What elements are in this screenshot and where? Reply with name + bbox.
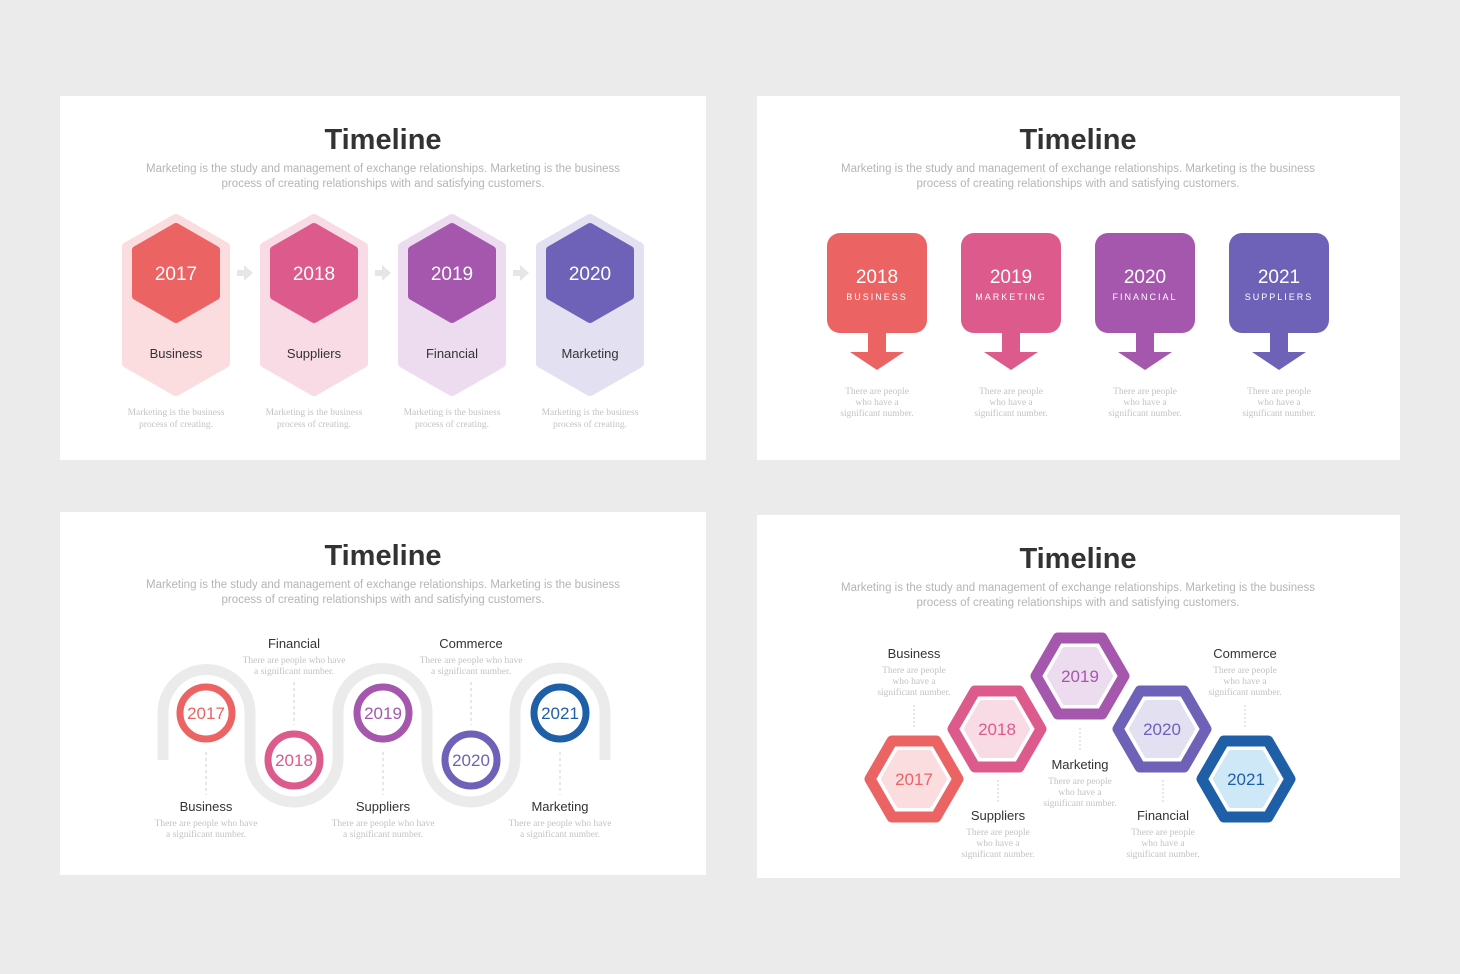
item 2018: Marketing is the business bbox=[266, 408, 363, 418]
card 2020: significant number. bbox=[1108, 408, 1182, 419]
item 2019: Financial bbox=[426, 346, 478, 361]
arrow bbox=[375, 265, 391, 281]
labels: a significant number. bbox=[431, 666, 511, 677]
hexagons: 2017 bbox=[895, 770, 933, 789]
hexagons bbox=[870, 638, 1290, 817]
item 2019: Marketing is the business bbox=[404, 408, 501, 418]
item 2018: Suppliers bbox=[287, 346, 342, 361]
hexagons: 2018 bbox=[978, 720, 1016, 739]
subtitle bbox=[146, 579, 620, 606]
card 2018 bbox=[827, 233, 927, 419]
circles: 2020 bbox=[452, 751, 490, 770]
card 2020: 2020 bbox=[1124, 267, 1166, 288]
labels: Business bbox=[180, 799, 233, 814]
labels: significant number. bbox=[1043, 798, 1117, 809]
labels: There are people who have bbox=[332, 819, 434, 829]
labels bbox=[877, 646, 1282, 860]
card 2019: who have a bbox=[989, 398, 1033, 408]
labels: Commerce bbox=[1213, 646, 1277, 661]
item 2018: process of creating. bbox=[277, 419, 351, 430]
circles: 2017 bbox=[187, 704, 225, 723]
labels: There are people bbox=[882, 666, 946, 676]
card 2018: BUSINESS bbox=[846, 292, 908, 302]
item 2020: 2020 bbox=[569, 264, 611, 285]
labels: There are people bbox=[1048, 777, 1112, 787]
card 2019: MARKETING bbox=[975, 292, 1047, 302]
subtitle: Marketing is the study and management of exchange relationships. Marketing is the business bbox=[146, 579, 620, 591]
labels: There are people bbox=[1213, 666, 1277, 676]
card 2019: significant number. bbox=[974, 408, 1048, 419]
labels: who have a bbox=[976, 839, 1020, 849]
circles: 2019 bbox=[364, 704, 402, 723]
subtitle: process of creating relationships with and satisfying customers. bbox=[916, 597, 1240, 609]
arrow bbox=[513, 265, 529, 281]
dashed connectors bbox=[914, 705, 1245, 802]
subtitle: process of creating relationships with and satisfying customers. bbox=[222, 594, 544, 606]
item 2020: Marketing is the business bbox=[542, 408, 639, 418]
item 2019: 2019 bbox=[431, 264, 473, 285]
card 2020 bbox=[1095, 233, 1195, 419]
labels: Financial bbox=[268, 636, 320, 651]
labels: There are people who have bbox=[155, 819, 257, 829]
labels: significant number. bbox=[1208, 687, 1282, 698]
labels: Marketing bbox=[1051, 757, 1109, 772]
card 2019: 2019 bbox=[990, 267, 1032, 288]
labels: who have a bbox=[892, 677, 936, 687]
labels bbox=[155, 636, 611, 840]
item 2020: Marketing bbox=[561, 346, 619, 361]
item 2017: Business bbox=[150, 346, 203, 361]
panel: wave timeline bbox=[60, 512, 706, 875]
card 2021: who have a bbox=[1257, 398, 1301, 408]
item 2019 bbox=[403, 219, 501, 430]
wave track bbox=[163, 668, 605, 802]
subtitle: process of creating relationships with and satisfying customers. bbox=[916, 178, 1240, 190]
dashed connectors bbox=[206, 682, 560, 795]
card 2021: significant number. bbox=[1242, 408, 1316, 419]
item 2017 bbox=[127, 219, 225, 430]
panel: card timeline bbox=[757, 96, 1400, 460]
item 2017: Marketing is the business bbox=[128, 408, 225, 418]
labels: significant number. bbox=[877, 687, 951, 698]
card 2019 bbox=[961, 233, 1061, 419]
subtitle: Marketing is the study and management of exchange relationships. Marketing is the business bbox=[841, 582, 1315, 594]
labels: Business bbox=[888, 646, 941, 661]
item 2018: 2018 bbox=[293, 264, 335, 285]
hexagons: 2020 bbox=[1143, 720, 1181, 739]
card 2020: who have a bbox=[1123, 398, 1167, 408]
subtitle bbox=[841, 163, 1315, 190]
card 2020: There are people bbox=[1113, 387, 1177, 397]
card 2021: 2021 bbox=[1258, 267, 1300, 288]
circles: 2021 bbox=[541, 704, 579, 723]
title: Timeline bbox=[1019, 124, 1137, 156]
labels: who have a bbox=[1058, 788, 1102, 798]
labels: There are people who have bbox=[509, 819, 611, 829]
labels: Suppliers bbox=[971, 808, 1026, 823]
item 2018 bbox=[265, 219, 363, 430]
labels: Financial bbox=[1137, 808, 1189, 823]
labels: a significant number. bbox=[343, 829, 423, 840]
labels: There are people bbox=[1131, 828, 1195, 838]
labels: There are people who have bbox=[420, 656, 522, 666]
title: Timeline bbox=[324, 540, 442, 572]
subtitle bbox=[841, 582, 1315, 609]
labels: Commerce bbox=[439, 636, 503, 651]
panel: honeycomb timeline bbox=[757, 515, 1400, 878]
labels: There are people who have bbox=[243, 656, 345, 666]
subtitle: Marketing is the study and management of exchange relationships. Marketing is the business bbox=[146, 163, 620, 175]
labels: significant number. bbox=[1126, 849, 1200, 860]
labels: There are people bbox=[966, 828, 1030, 838]
labels: a significant number. bbox=[254, 666, 334, 677]
labels: significant number. bbox=[961, 849, 1035, 860]
item 2019: process of creating. bbox=[415, 419, 489, 430]
labels: Marketing bbox=[531, 799, 589, 814]
card 2018: There are people bbox=[845, 387, 909, 397]
hexagons: 2021 bbox=[1227, 770, 1265, 789]
title: Timeline bbox=[1019, 543, 1137, 575]
card 2018: 2018 bbox=[856, 267, 898, 288]
labels: a significant number. bbox=[166, 829, 246, 840]
item 2017: 2017 bbox=[155, 264, 197, 285]
item 2020 bbox=[541, 219, 639, 430]
subtitle: Marketing is the study and management of exchange relationships. Marketing is the business bbox=[841, 163, 1315, 175]
card 2021: There are people bbox=[1247, 387, 1311, 397]
card 2020: FINANCIAL bbox=[1112, 292, 1178, 302]
subtitle bbox=[146, 163, 620, 190]
card 2018: significant number. bbox=[840, 408, 914, 419]
circles: 2018 bbox=[275, 751, 313, 770]
subtitle: process of creating relationships with and satisfying customers. bbox=[222, 178, 544, 190]
card 2021: SUPPLIERS bbox=[1245, 292, 1313, 302]
labels: who have a bbox=[1223, 677, 1267, 687]
arrow bbox=[237, 265, 253, 281]
card 2021 bbox=[1229, 233, 1329, 419]
item 2017: process of creating. bbox=[139, 419, 213, 430]
card 2018: who have a bbox=[855, 398, 899, 408]
title: Timeline bbox=[324, 124, 442, 156]
labels: a significant number. bbox=[520, 829, 600, 840]
hexagons: 2019 bbox=[1061, 667, 1099, 686]
card 2019: There are people bbox=[979, 387, 1043, 397]
labels: who have a bbox=[1141, 839, 1185, 849]
item 2020: process of creating. bbox=[553, 419, 627, 430]
circles bbox=[180, 687, 586, 786]
labels: Suppliers bbox=[356, 799, 411, 814]
panel: hexagon timeline bbox=[60, 96, 706, 460]
